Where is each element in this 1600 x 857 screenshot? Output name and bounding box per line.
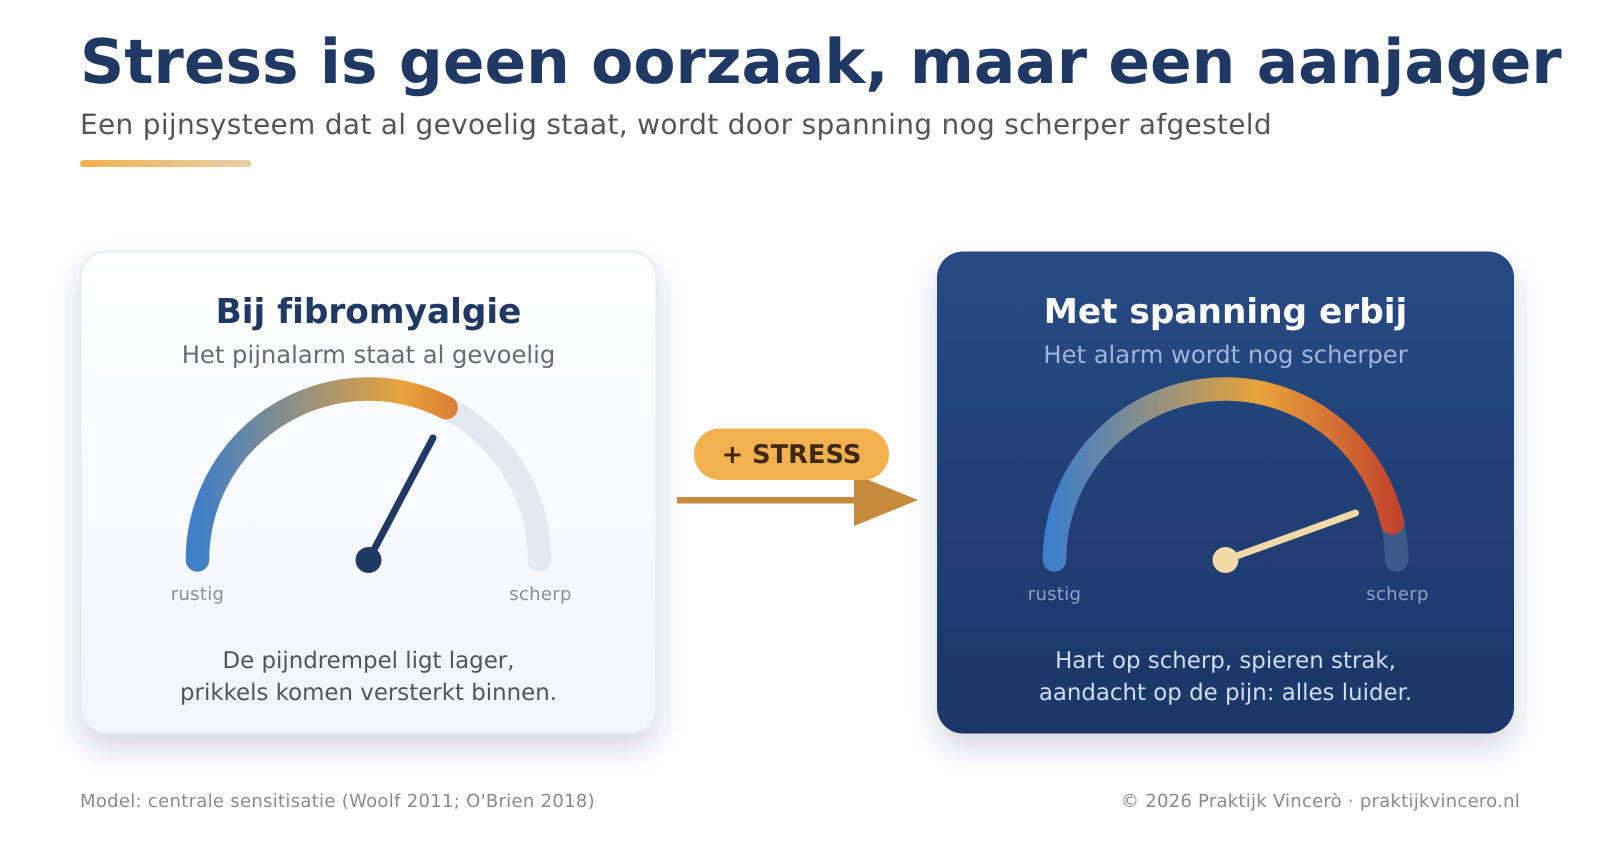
- footer credit: © 2026 Praktijk Vincerò · praktijkvincero.nl: [1121, 791, 1520, 812]
- gauge needle: [1226, 513, 1356, 560]
- gauge: sensitive: [171, 389, 572, 605]
- panel subheading: Het pijnalarm staat al gevoelig: [182, 340, 555, 369]
- title accent rule: [80, 160, 252, 167]
- panel background: [80, 252, 656, 734]
- gauge needle: [368, 438, 433, 560]
- gauge hub: [1212, 547, 1238, 573]
- scale label high: scherp: [509, 584, 572, 605]
- panel body text: aandacht op de pijn: alles luider.: [1039, 680, 1412, 706]
- gauge track: [198, 389, 540, 560]
- gauge value arc: [198, 389, 446, 560]
- footer source: Model: centrale sensitisatie (Woolf 2011; O'Brien 2018): [80, 791, 595, 812]
- panel body text: prikkels komen versterkt binnen.: [180, 680, 557, 706]
- panel body text: Hart op scherp, spieren strak,: [1055, 648, 1396, 674]
- stress label: + STRESS: [722, 440, 861, 470]
- gauge hub: [356, 547, 382, 573]
- arrow shaft: [677, 497, 857, 504]
- stress pill: [694, 428, 889, 480]
- panel heading: Met spanning erbij: [1044, 292, 1407, 332]
- panel background: [937, 252, 1514, 734]
- panel body text: De pijndrempel ligt lager,: [222, 648, 515, 674]
- scale label low: rustig: [171, 584, 224, 605]
- panel subheading: Het alarm wordt nog scherper: [1043, 340, 1408, 369]
- arrow: stress: [677, 428, 918, 526]
- gauge: sharper: [1028, 389, 1429, 605]
- subtitle: Een pijnsysteem dat al gevoelig staat, wordt door spanning nog scherper afgesteld: [80, 108, 1272, 141]
- scale label high: scherp: [1366, 584, 1429, 605]
- scale label low: rustig: [1028, 584, 1081, 605]
- panel: bij fibromyalgie: [80, 252, 656, 734]
- title: Stress is geen oorzaak, maar een aanjager: [80, 27, 1562, 98]
- gauge value arc: [1054, 389, 1392, 560]
- arrow head: [854, 474, 918, 526]
- gauge track: [1054, 389, 1396, 560]
- panel heading: Bij fibromyalgie: [216, 292, 521, 332]
- panel: met spanning erbij: [937, 252, 1514, 734]
